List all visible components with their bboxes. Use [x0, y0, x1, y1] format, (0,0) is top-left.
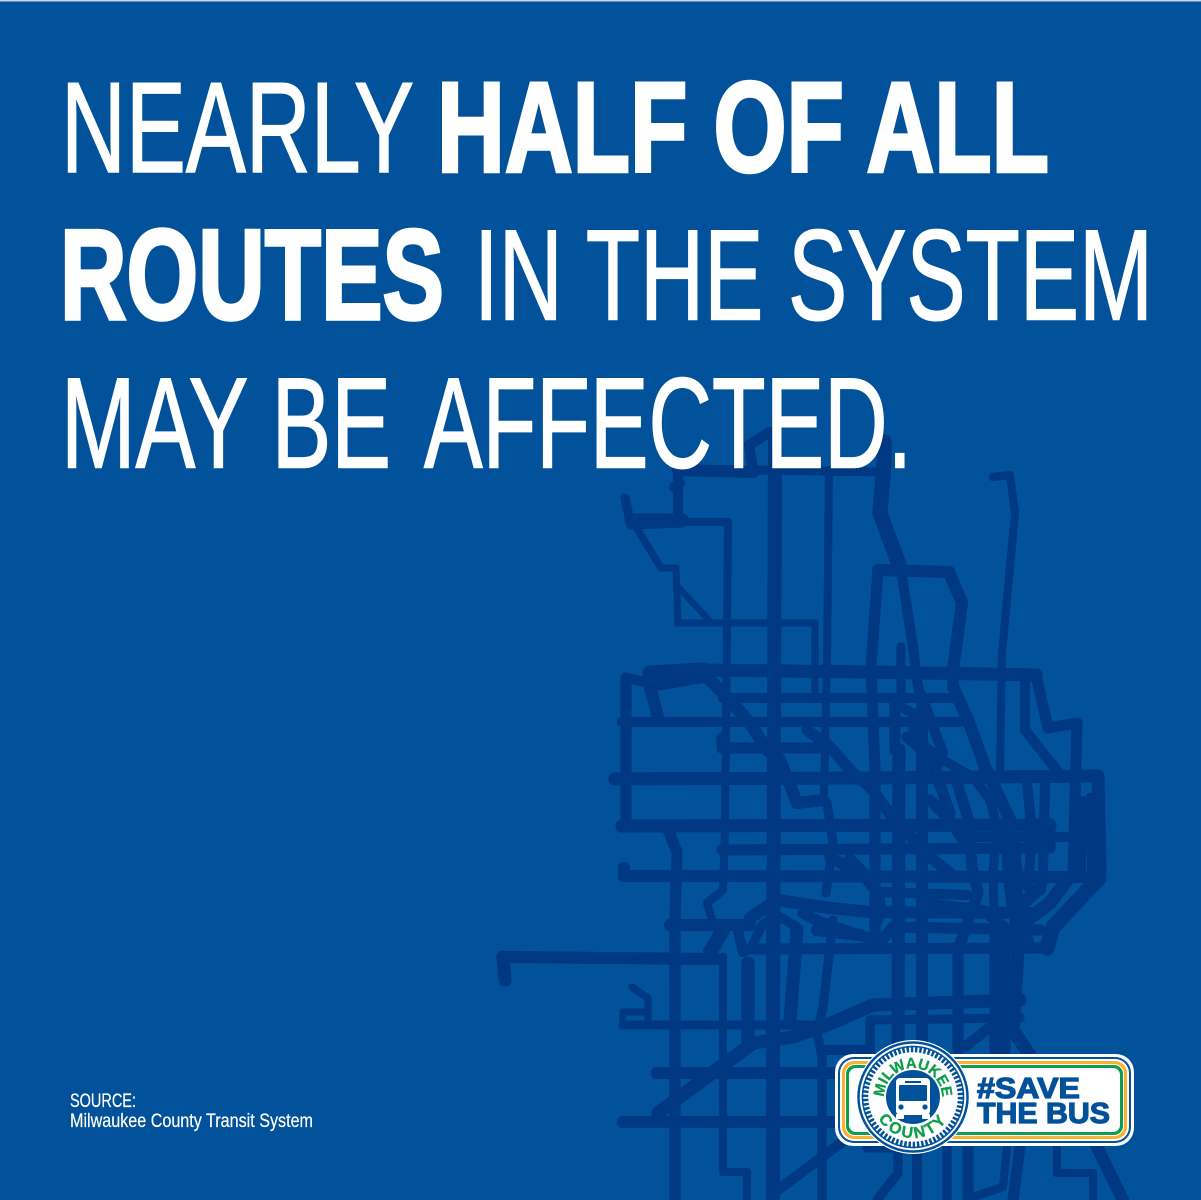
headline line 1: NEARLY	[61, 56, 414, 200]
headline line 2: ROUTES	[60, 204, 444, 347]
source note: Milwaukee County Transit System	[70, 1111, 313, 1132]
source note: SOURCE:	[70, 1091, 136, 1112]
logo text: #save the bus: #SAVE	[977, 1073, 1080, 1105]
logo seal: milwaukee county: COUNTY	[880, 1114, 944, 1138]
headline line 3: MAY BE	[61, 352, 391, 496]
headline line 3: AFFECTED.	[424, 352, 912, 496]
headline line 3	[61, 352, 912, 496]
headline line 1	[61, 56, 1049, 200]
transit route map	[503, 432, 1123, 1200]
logo text: #save the bus	[977, 1073, 1110, 1130]
logo seal: milwaukee county	[857, 1040, 969, 1154]
logo seal: milwaukee county: MILWAUKEE	[873, 1058, 953, 1097]
icon: bus	[896, 1078, 930, 1119]
headline line 2	[60, 204, 1153, 348]
source note	[70, 1091, 313, 1132]
headline	[60, 56, 1153, 496]
logo text: #save the bus: THE BUS	[977, 1098, 1110, 1130]
logo: save the bus badge	[835, 1040, 1134, 1154]
